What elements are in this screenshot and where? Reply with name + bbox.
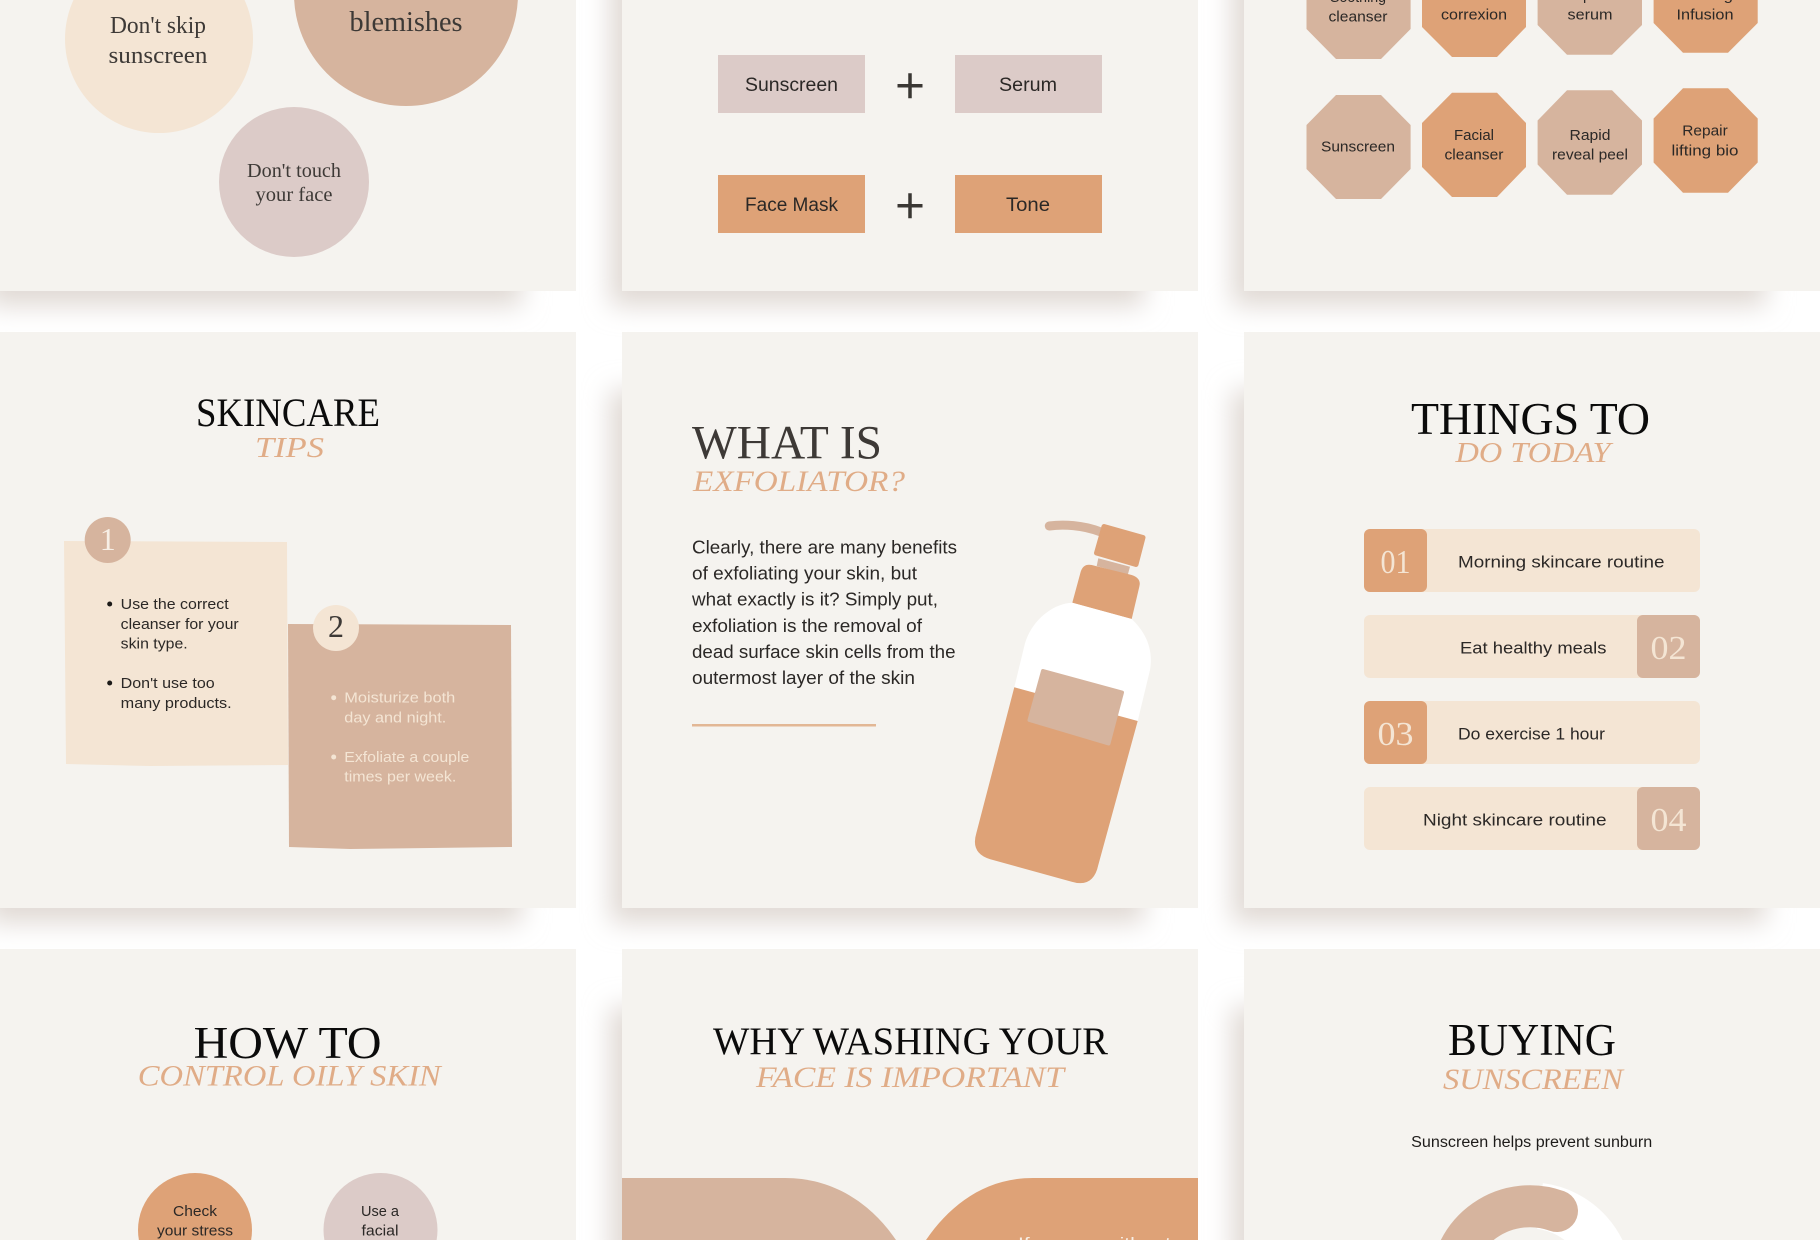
text block: explanation: exfoliation is the removal of <box>692 616 923 636</box>
card: tip 2: Moisturize both <box>344 690 455 707</box>
box: serum: Serum <box>999 75 1057 96</box>
octagon: sunscreen <box>1306 95 1411 199</box>
octagon: correxion: correxion <box>1441 8 1507 24</box>
icon: plus <box>898 193 922 218</box>
row: do exercise 1 hour <box>1364 701 1700 764</box>
card: tip 1 <box>64 517 288 766</box>
icon: plus <box>898 73 922 98</box>
row: night skincare routine <box>1364 787 1700 850</box>
card: tip 2: times per week. <box>344 769 456 786</box>
arch: right <box>926 1178 1198 1240</box>
card: tip 1: cleanser for your <box>121 616 239 633</box>
circle: don't skip sunscreen: sunscreen <box>108 43 208 69</box>
heading: why washing your face: WHY WASHING YOUR <box>713 1020 1108 1063</box>
heading: buying sunscreen: SUNSCREEN <box>1443 1063 1625 1096</box>
card: tip 1: skin type. <box>121 636 188 653</box>
circle: check your stress: Check <box>173 1204 218 1220</box>
heading: things to do today <box>1411 393 1650 469</box>
row: do exercise 1 hour: Do exercise 1 hour <box>1458 724 1605 743</box>
heading: why washing your face: FACE IS IMPORTANT <box>755 1061 1067 1094</box>
row: eat healthy meals: 02 <box>1650 630 1686 667</box>
icon: pump bottle <box>975 525 1151 883</box>
card: tip 2: Exfoliate a couple <box>344 749 469 766</box>
card: tip 2 <box>288 605 512 849</box>
panel: why washing your face is important <box>622 949 1198 1240</box>
circle: don't touch your face: Don't touch <box>247 160 341 182</box>
octagon: rapid reveal peel: reveal peel <box>1552 148 1628 164</box>
heading: skincare tips <box>196 390 380 464</box>
text block: explanation: Clearly, there are many benefits <box>692 538 957 558</box>
octagon: soothing cleanser <box>1306 0 1411 59</box>
panel: skincare habits circles <box>0 0 576 291</box>
octagon: sunscreen: Sunscreen <box>1321 140 1395 156</box>
panel: buying sunscreen <box>1244 949 1820 1240</box>
row: night skincare routine: Night skincare routine <box>1423 810 1606 829</box>
card: tip 1: Use the correct <box>121 596 230 613</box>
heading: what is exfoliator: WHAT IS <box>692 416 882 470</box>
text block: explanation: of exfoliating your skin, but <box>692 564 917 584</box>
card: tip 2: day and night. <box>344 709 446 726</box>
row: morning skincare routine: 01 <box>1380 544 1410 581</box>
card: tip 1: Don't use too <box>121 675 215 692</box>
octagon: repair lifting bio <box>1654 88 1758 193</box>
panel: skincare tips <box>0 332 576 908</box>
text block: explanation: dead surface skin cells from the <box>692 642 956 662</box>
heading: things to do today: THINGS TO <box>1411 393 1650 444</box>
heading: buying sunscreen: BUYING <box>1448 1015 1616 1065</box>
row: do exercise 1 hour: 03 <box>1378 716 1414 753</box>
panel: product combinations <box>622 0 1198 291</box>
octagon: repair lifting bio: Repair <box>1682 124 1728 140</box>
panel: product octagons <box>1244 0 1820 291</box>
box: face mask <box>718 175 865 233</box>
card: tip 1: many products. <box>121 695 232 712</box>
box: sunscreen <box>718 55 865 113</box>
octagon: peptide serum: serum <box>1568 8 1612 24</box>
text: sunscreen helps prevent sunburn: Sunscreen helps prevent sunburn <box>1411 1134 1652 1151</box>
box: face mask: Face Mask <box>745 195 838 216</box>
heading: skincare tips: SKINCARE <box>196 390 380 435</box>
text block: explanation <box>691 538 957 688</box>
row: morning skincare routine: Morning skincare routine <box>1458 553 1664 572</box>
heading: things to do today: DO TODAY <box>1454 437 1614 469</box>
octagon: soothing cleanser: cleanser <box>1328 10 1388 26</box>
circle: don't skip sunscreen <box>65 0 253 133</box>
arch: left <box>622 1178 896 1240</box>
octagon: facial cleanser <box>1422 93 1526 197</box>
card: tip 2: 2 <box>328 608 344 644</box>
octagon: repair lifting bio: lifting bio <box>1672 144 1738 160</box>
circle: blemishes: blemishes <box>350 7 462 38</box>
heading: how to control oily skin <box>138 1018 443 1093</box>
panel: how to control oily skin <box>0 949 576 1240</box>
octagon: firming infusion <box>1654 0 1758 53</box>
row: eat healthy meals <box>1364 615 1700 678</box>
text block: explanation: what exactly is it? Simply put, <box>691 590 938 610</box>
heading: what is exfoliator: EXFOLIATOR? <box>692 465 905 498</box>
text block: explanation: outermost layer of the skin <box>692 668 915 688</box>
box: sunscreen: Sunscreen <box>745 75 838 96</box>
panel: things to do today <box>1244 332 1820 908</box>
card: tip 1: 1 <box>100 521 116 557</box>
heading: how to control oily skin: HOW TO <box>194 1018 382 1068</box>
box: tone <box>955 175 1102 233</box>
circle: check your stress: your stress <box>157 1224 233 1240</box>
box: tone: Tone <box>1006 195 1050 216</box>
octagon: rapid reveal peel <box>1538 90 1642 195</box>
octagon: facial cleanser: cleanser <box>1444 148 1504 164</box>
panel: what is exfoliator <box>622 332 1198 908</box>
circle: use a facial: facial <box>362 1224 398 1240</box>
octagon: firming infusion: Infusion <box>1676 8 1734 24</box>
circle: blemishes <box>294 0 518 106</box>
circle: use a facial: Use a <box>361 1204 400 1220</box>
box: serum <box>955 55 1102 113</box>
octagon: correxion <box>1422 0 1526 57</box>
chart: donut arc <box>1451 1206 1610 1240</box>
heading: how to control oily skin: CONTROL OILY SKIN <box>138 1060 443 1093</box>
octagon: peptide serum <box>1538 0 1642 55</box>
heading: what is exfoliator <box>692 416 905 498</box>
heading: skincare tips: TIPS <box>255 432 325 464</box>
row: eat healthy meals: Eat healthy meals <box>1460 638 1606 658</box>
octagon: rapid reveal peel: Rapid <box>1570 128 1610 144</box>
circle: check your stress <box>138 1173 252 1240</box>
circle: don't touch your face <box>219 107 369 257</box>
circle: don't skip sunscreen: Don't skip <box>110 13 206 39</box>
octagon: facial cleanser: Facial <box>1454 128 1494 144</box>
circle: use a facial <box>324 1173 438 1240</box>
row: morning skincare routine <box>1364 529 1700 592</box>
circle: don't touch your face: your face <box>256 184 333 206</box>
heading: buying sunscreen <box>1443 1015 1625 1096</box>
heading: why washing your face <box>713 1020 1108 1094</box>
row: night skincare routine: 04 <box>1650 802 1686 839</box>
